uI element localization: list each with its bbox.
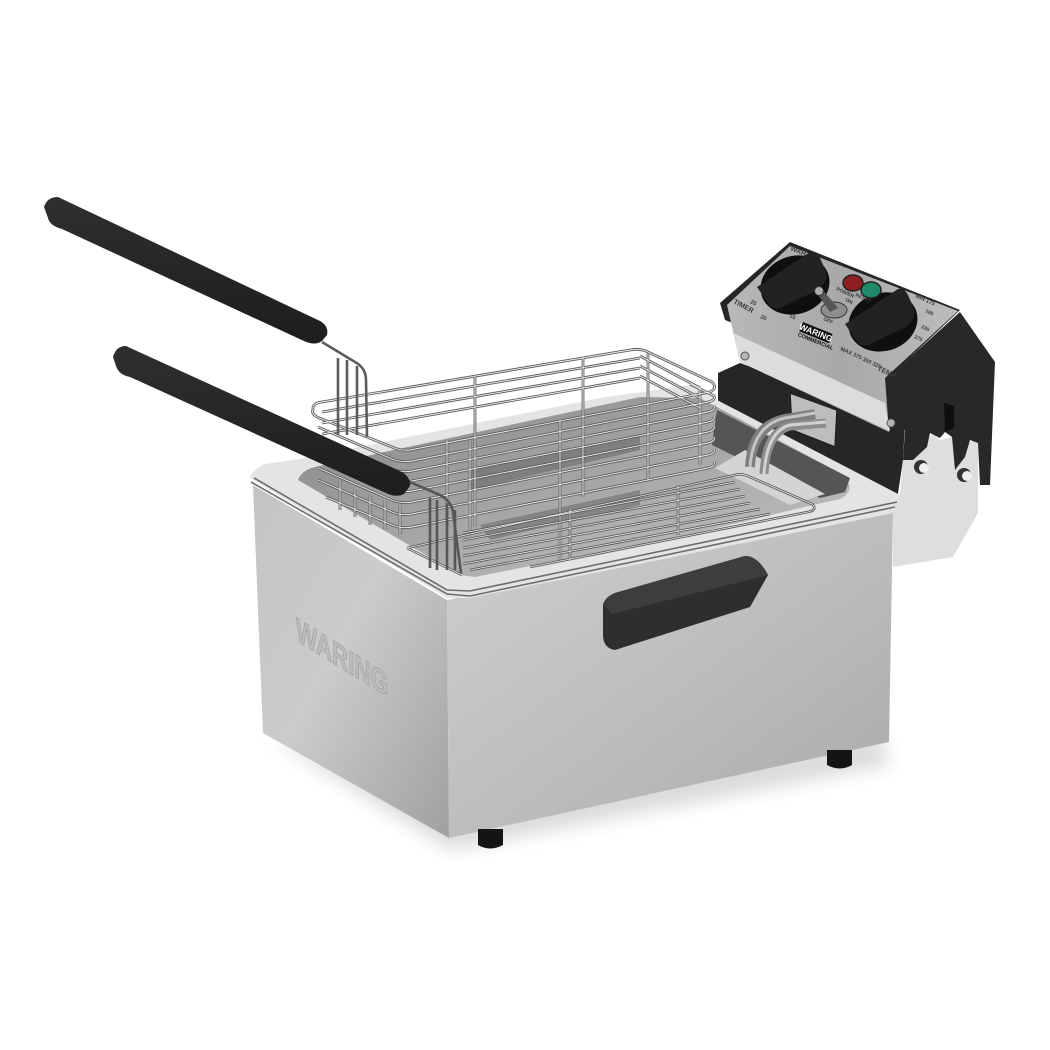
dark well reflections — [470, 435, 640, 540]
rear handle bracket — [322, 342, 367, 437]
rear black housing — [718, 363, 905, 500]
rear basket handle — [44, 197, 327, 344]
panel labels: RESET — [854, 292, 872, 305]
back basket — [312, 349, 715, 560]
reset light — [861, 282, 881, 298]
bracket pins — [914, 460, 972, 482]
stainless plate — [727, 246, 958, 432]
top rim — [250, 385, 900, 598]
panel labels: 25 — [749, 299, 757, 307]
panel labels: WAR — [789, 245, 807, 258]
power light — [843, 275, 863, 291]
front grip handle — [603, 556, 768, 650]
panel labels: POWER — [835, 286, 855, 300]
panel labels: ON — [844, 297, 854, 306]
panel labels: 195 — [924, 308, 934, 317]
floor shadow — [265, 735, 890, 850]
basket wire highlight — [312, 349, 715, 560]
panel labels — [732, 245, 936, 380]
rim edge lines — [251, 478, 897, 596]
panel labels: OFF — [822, 316, 834, 326]
panel labels: 235 — [920, 324, 930, 333]
logo: COMMERCIAL — [797, 332, 835, 352]
panel labels: 275 — [913, 334, 923, 343]
fry well — [298, 397, 850, 577]
lower bend strip — [733, 333, 890, 431]
front handle bracket — [405, 480, 461, 573]
front basket shading — [407, 474, 814, 575]
heating element bracket — [790, 393, 837, 447]
panel labels: 15 — [788, 313, 796, 321]
front basket highlight — [407, 474, 814, 575]
control box slot — [944, 403, 954, 432]
timer knob — [753, 247, 837, 323]
panel labels: MIN 175 — [914, 293, 936, 308]
control panel — [720, 242, 960, 432]
panel labels: TEMP — [876, 365, 897, 380]
temperature knob — [841, 284, 925, 360]
control box black side — [885, 312, 995, 485]
screws — [741, 352, 895, 427]
panel labels: MAX 375 350 325 — [839, 346, 882, 371]
panel labels: 20 — [759, 314, 767, 322]
silver mounting bracket — [893, 433, 978, 567]
front basket handle — [113, 346, 410, 496]
well floor — [715, 450, 825, 505]
body left face — [253, 485, 449, 838]
logo — [795, 321, 839, 352]
rear well wall — [712, 410, 850, 498]
front basket — [407, 474, 814, 575]
embossed brand: WARING — [296, 610, 388, 704]
body front face — [447, 513, 893, 838]
basket wire shading — [312, 349, 715, 560]
panel labels: TIMER — [732, 299, 755, 315]
black top edge — [720, 242, 960, 381]
toggle switch — [814, 286, 847, 318]
heating element tubes — [750, 413, 826, 474]
logo: WARING — [798, 321, 834, 344]
feet — [478, 750, 852, 848]
